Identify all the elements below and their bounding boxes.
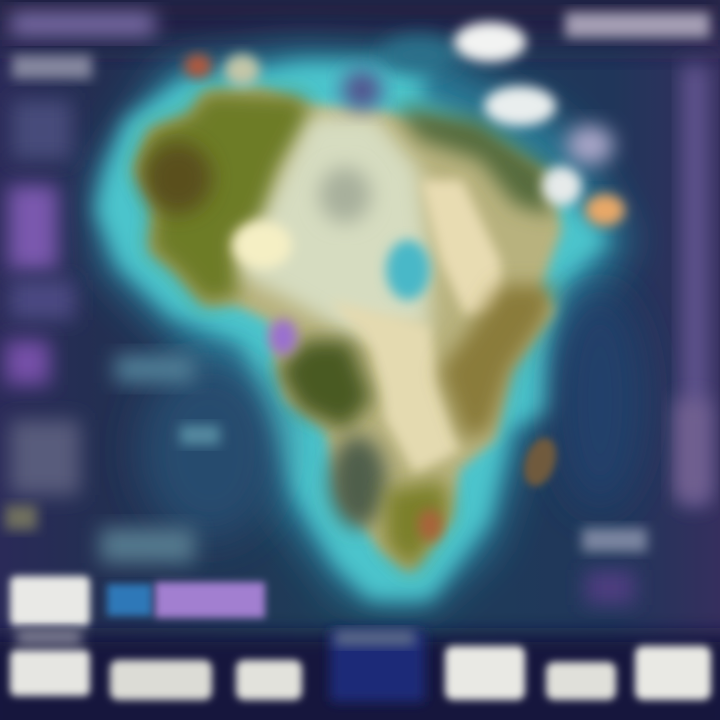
region: central lake	[386, 240, 430, 300]
ocean glow around continent	[95, 35, 645, 610]
region: southern cream belt	[330, 300, 460, 475]
legend bar	[107, 582, 265, 618]
marker: top purple	[342, 70, 382, 110]
region: eastern cream desert	[420, 180, 505, 315]
box: left connector	[16, 628, 82, 646]
heading: top left	[10, 12, 155, 36]
label: ocean lower	[180, 425, 220, 445]
subheading	[12, 55, 92, 79]
text small	[5, 505, 37, 530]
region: dark olive patch	[144, 142, 212, 214]
purple block	[585, 570, 635, 605]
box: bottom second	[110, 660, 212, 700]
purple column	[682, 65, 708, 505]
box: centre label	[335, 630, 415, 646]
marker: top red	[184, 54, 212, 78]
box: right third	[635, 646, 711, 700]
purple highlight lower	[5, 340, 50, 385]
clouds and top accents	[184, 22, 625, 226]
region: east brown	[440, 285, 555, 440]
left sidebar text blocks	[5, 12, 155, 530]
label: lower left	[100, 528, 195, 563]
box: bottom third	[236, 660, 302, 700]
cloud: pale purple	[566, 125, 614, 165]
text lines lower	[10, 420, 80, 495]
region: north-east green	[395, 105, 552, 215]
region: southern orange accent	[418, 509, 442, 541]
heading: top right	[565, 12, 710, 38]
region: central pale desert	[240, 115, 430, 335]
box: right second	[546, 662, 616, 700]
region: north-west olive	[135, 92, 315, 305]
region: central dark green	[278, 340, 372, 430]
marker: top pale	[224, 54, 260, 86]
text lines	[12, 100, 72, 160]
region: south-west grey green	[330, 436, 386, 528]
label: ocean upper	[115, 355, 195, 383]
cloud: middle	[484, 86, 556, 126]
land base	[135, 88, 562, 572]
legend: purple segment	[155, 582, 265, 618]
map: continent	[135, 88, 562, 572]
text lines middle	[10, 280, 75, 320]
marker: orange	[585, 194, 625, 226]
region: purple marker	[269, 319, 297, 355]
region: grey centre	[319, 167, 371, 223]
box: left lower	[10, 650, 90, 696]
purple highlight upper	[8, 185, 58, 270]
cloud: top	[454, 22, 526, 62]
box: navy centre	[330, 630, 425, 702]
region: southern olive	[385, 480, 450, 572]
island: Madagascar	[518, 434, 562, 490]
cloud: lower	[542, 166, 582, 206]
legend: blue segment	[107, 584, 152, 616]
bottom boxes	[10, 576, 711, 702]
column lower highlight	[675, 400, 710, 500]
right sidebar	[565, 12, 710, 605]
side label	[582, 528, 647, 552]
box: left upper	[10, 576, 90, 626]
region: bright sand spot	[232, 221, 292, 269]
box: right first	[445, 646, 525, 700]
small map labels	[100, 355, 220, 563]
